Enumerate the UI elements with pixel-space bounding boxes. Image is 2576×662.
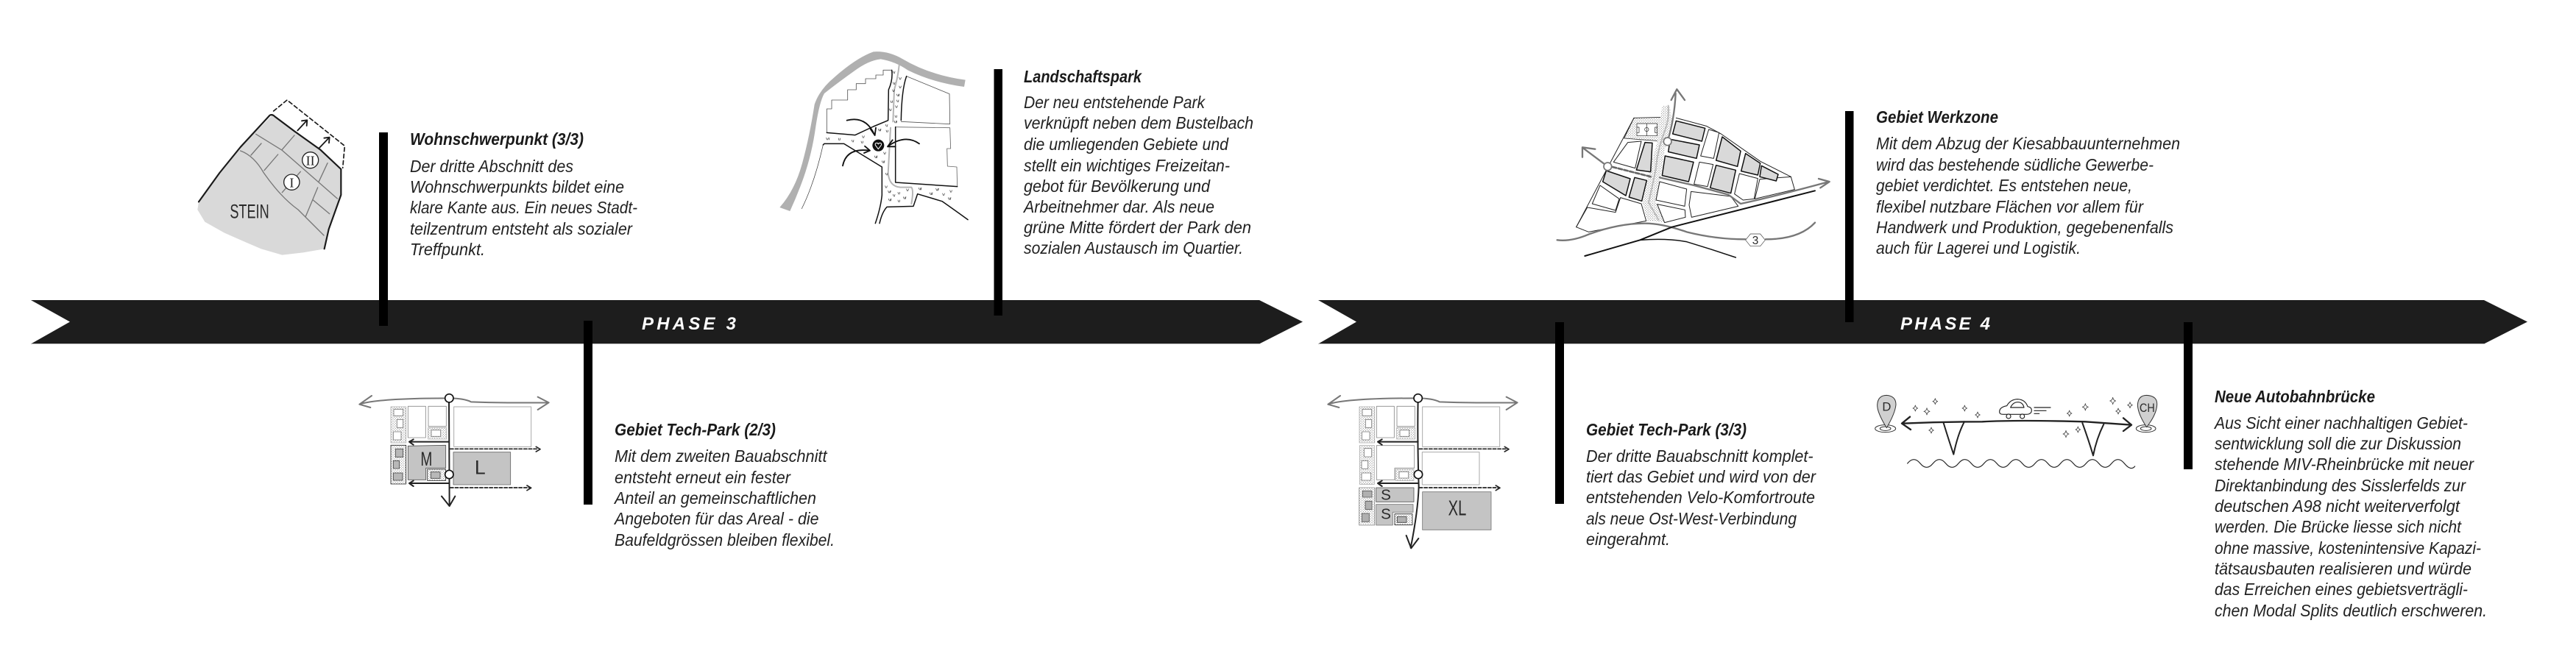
timeline arrow: phase 3 [31, 300, 1303, 344]
body text: teilzentrum entsteht als sozialer [410, 219, 633, 238]
icon: Stein district map: I [289, 175, 294, 190]
body text: Wohnschwerpunkts bildet eine [410, 177, 624, 196]
body text: Der dritte Bauabschnitt komplet- [1586, 446, 1814, 466]
icon: Tech-Park plan S and XL: S [1381, 506, 1391, 523]
panel: Neue Autobahnbrücke [1875, 322, 2487, 620]
timeline arrow: phase 4 [1318, 300, 2527, 344]
heading: Gebiet Tech-Park (3/3) [1586, 420, 1747, 439]
body text: werden. Die Brücke liesse sich nicht [2215, 517, 2462, 536]
icon: Stein district map: II [306, 153, 315, 168]
marker bar [584, 321, 592, 505]
body text: entsteht erneut ein fester [615, 468, 791, 487]
body text: das Erreichen eines gebietsverträgli- [2215, 580, 2468, 599]
heading: Wohnschwerpunkt (3/3) [410, 129, 584, 149]
panel: Landschaftspark [779, 51, 1253, 316]
body text: tätsausbauten realisieren und würde [2215, 559, 2471, 578]
body text [613, 446, 835, 549]
body text: die umliegenden Gebiete und [1024, 135, 1229, 154]
body text: Mit dem Abzug der Kiesabbauunternehmen [1876, 134, 2180, 153]
heading: Landschaftspark [1024, 67, 1142, 86]
icon: Stein district map: STEIN [230, 201, 269, 223]
body text: chen Modal Splits deutlich erschweren. [2215, 601, 2487, 620]
body text: sozialen Austausch im Quartier. [1024, 238, 1243, 257]
body text: auch für Lagerei und Logistik. [1876, 238, 2081, 257]
body text: Arbeitnehmer dar. Als neue [1022, 197, 1214, 216]
body text: Der neu entstehende Park [1024, 93, 1206, 112]
body text: Der dritte Abschnitt des [410, 157, 573, 176]
panel: Gebiet Tech-Park 2/3 [359, 321, 835, 549]
marker bar [379, 132, 388, 326]
body text: sentwicklung soll die zur Diskussion [2215, 434, 2461, 453]
phase 3 label: PHASE 3 [642, 314, 737, 334]
icon: bridge between D and CH: CH [2140, 401, 2155, 415]
body text: Aus Sicht einer nachhaltigen Gebiet- [2213, 413, 2468, 433]
panel: Gebiet Tech-Park 3/3 [1328, 322, 1816, 549]
body text: stehende MIV-Rheinbrücke mit neuer [2215, 455, 2474, 474]
body text: Angeboten für das Areal - die [613, 509, 818, 528]
body text [410, 157, 637, 259]
icon: bridge between D and CH [1875, 395, 2157, 469]
body text: als neue Ost-West-Verbindung [1586, 509, 1797, 528]
icon: Tech-Park plan M and L [359, 394, 549, 506]
icon: bridge between D and CH: D [1882, 399, 1891, 413]
panel: Gebiet Werkzone [1557, 89, 2180, 322]
panel: Wohnschwerpunkt [197, 100, 637, 326]
body text: ohne massive, kostenintensive Kapazi- [2215, 538, 2481, 558]
body text: flexibel nutzbare Flächen vor allem für [1876, 197, 2144, 216]
icon: Stein district map [197, 100, 344, 255]
body text: verknüpft neben dem Bustelbach [1024, 113, 1253, 132]
body text: grüne Mitte fördert der Park den [1024, 218, 1251, 237]
heading: Neue Autobahnbrücke [2215, 387, 2375, 406]
body text: gebiet verdichtet. Es entstehen neue, [1876, 176, 2132, 195]
body text: tiert das Gebiet und wird von der [1586, 467, 1816, 486]
body text: entstehenden Velo-Komfortroute [1586, 488, 1815, 507]
icon: Tech-Park plan S and XL [1328, 394, 1518, 548]
body text: Baufeldgrössen bleiben flexibel. [615, 530, 835, 549]
phase 4 label: PHASE 4 [1900, 314, 1990, 334]
body text: Direktanbindung des Sisslerfelds zur [2215, 476, 2466, 495]
heading: Gebiet Werkzone [1876, 107, 1998, 127]
marker bar [2184, 322, 2193, 469]
body text [1586, 446, 1816, 549]
body text: deutschen A98 nicht weiterverfolgt [2215, 496, 2461, 516]
body text: Treffpunkt. [410, 240, 485, 259]
body text: Mit dem zweiten Bauabschnitt [615, 446, 828, 466]
body text: stellt ein wichtiges Freizeitan- [1024, 156, 1230, 175]
body text: Anteil an gemeinschaftlichen [613, 488, 816, 508]
body text: wird das bestehende südliche Gewerbe- [1876, 155, 2154, 174]
marker bar [994, 69, 1002, 316]
heading: Gebiet Tech-Park (2/3) [615, 420, 776, 439]
marker bar [1845, 111, 1853, 322]
icon: Tech-Park plan M and L: L [475, 457, 486, 479]
body text [1876, 134, 2180, 257]
body text: klare Kante aus. Ein neues Stadt- [410, 198, 637, 217]
body text [2213, 413, 2487, 620]
icon: Tech-Park plan S and XL: S [1381, 487, 1391, 504]
body text: eingerahmt. [1586, 530, 1670, 549]
body text [1022, 93, 1253, 257]
marker bar [1555, 322, 1564, 504]
icon: Werkzone map: 3 [1752, 235, 1758, 247]
icon: park map [779, 51, 968, 224]
body text: Handwerk und Produktion, gegebenenfalls [1876, 218, 2173, 237]
icon: Tech-Park plan S and XL: XL [1448, 497, 1466, 521]
icon: Werkzone map [1557, 89, 1830, 257]
body text: gebot für Bevölkerung und [1024, 177, 1211, 196]
icon: Tech-Park plan M and L: M [420, 448, 432, 470]
